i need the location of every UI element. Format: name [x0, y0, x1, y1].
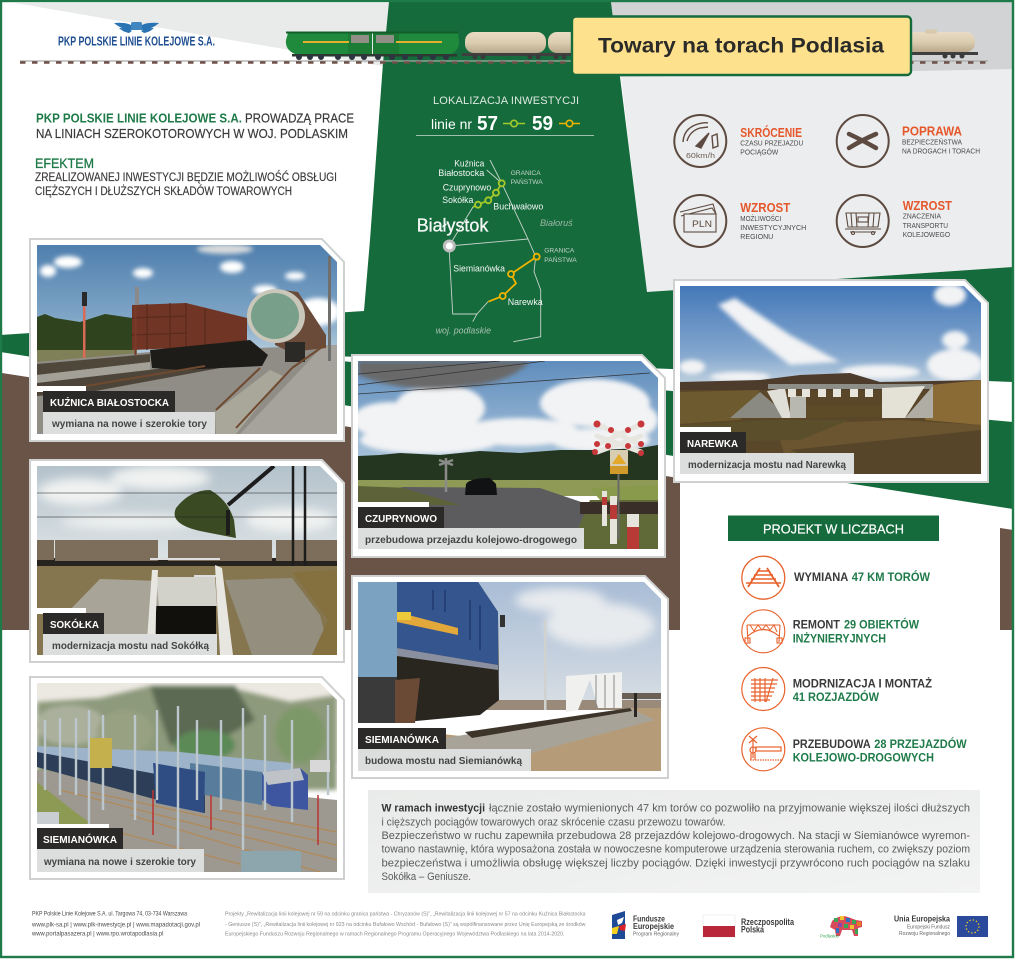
footer: contact: www.plk-sa.pl | www.plk-inwestycje.pl | www.mapadotacji.gov.pl	[31, 923, 200, 929]
panel: location header: 59	[532, 113, 553, 135]
item: level crossings: KOLEJOWO-DROGOWYCH	[793, 753, 934, 765]
intro text: NA LINIACH SZEROKOTOROWYCH W WOJ. PODLASKIM	[36, 126, 348, 141]
caption: budowa mostu nad Siemianówką	[365, 755, 522, 767]
benefit: skrócenie	[674, 115, 803, 167]
benefit: wzrost znaczenia: TRANSPORTU	[903, 221, 948, 230]
title: Towary na torach Podlasia	[598, 34, 884, 58]
item: turnouts: 41 ROZJAZDÓW	[793, 691, 879, 704]
photo: level crossing with car	[352, 361, 658, 549]
caption: wymiana na nowe i szerokie tory	[51, 418, 207, 430]
photo card: Czuprynowo	[352, 355, 665, 557]
intro text: CIĘŻSZYCH I DŁUŻSZYCH SKŁADÓW TOWAROWYCH	[35, 185, 292, 198]
caption	[37, 824, 204, 872]
intro text	[35, 110, 354, 198]
background: white wedge in green band	[253, 353, 1013, 422]
icon: speedometer: 60km/h	[686, 151, 715, 160]
logo: Unia Europejska	[894, 915, 988, 937]
text block: description: towano nastawnię, która wyposażona została w nowoczesne komputerowe urządzenia sterowania ruchem, co zwiększy poziom	[382, 844, 970, 856]
caption: KUŹNICA BIAŁOSTOCKA	[50, 396, 169, 409]
footer: project note	[225, 912, 586, 938]
item: track replacement	[742, 556, 930, 599]
map: Białystok marker	[444, 241, 454, 251]
benefit: poprawa: NA DROGACH I TORACH	[902, 147, 980, 156]
footer: contact: www.portalpasazera.pl | www.rpo.wrotapodlasia.pl	[31, 932, 163, 938]
map: line 59	[488, 254, 540, 302]
map: line 57	[473, 180, 505, 208]
item: engineering structures: 29 OBIEKTÓW	[844, 619, 919, 632]
map: labels: GRANICA	[544, 248, 575, 255]
footer: project note: Europejskiego Funduszu Rozwoju Regionalnego w ramach Regionalnego Programu Operacyjnego Województwa Podlaskiego na lata 2014-2020.	[225, 932, 565, 938]
caption: modernizacja mostu nad Narewką	[688, 459, 846, 471]
benefit: wzrost znaczenia: KOLEJOWEGO	[903, 230, 950, 239]
item: track replacement: 47 KM TORÓW	[852, 571, 930, 584]
caption	[358, 502, 584, 549]
icon: crossing barrier	[742, 728, 785, 771]
caption: NAREWKA	[687, 438, 738, 450]
intro text: ZREALIZOWANEJ INWESTYCJI BĘDZIE MOŻLIWOŚĆ OBSŁUGI	[35, 171, 337, 184]
benefit: skrócenie: CZASU PRZEJAZDU	[740, 139, 803, 148]
background: light grey triangle top left	[15, 3, 389, 66]
item: track replacement: WYMIANA	[794, 572, 848, 584]
photo card: Kuźnica Białostocka	[30, 239, 344, 441]
photo: bridge over culvert	[37, 466, 337, 655]
text block: description: Sokółka – Geniusze.	[382, 871, 471, 883]
caption	[37, 386, 215, 434]
footer: project note: - Geniusze (S)”, „Rewitalizacja linii kolejowej nr 923 na odcinku Bufałowo Wschód - Bufałowo (S)” są współfinansowane przez Unię Europejską ze środków	[225, 922, 586, 928]
caption: przebudowa przejazdu kolejowo-drogowego	[365, 534, 577, 546]
logo: Fundusze Europejskie	[612, 911, 679, 939]
title	[572, 16, 911, 75]
logo: Fundusze Europejskie: Program Regionalny	[633, 932, 679, 938]
photo: locomotive and bridge	[358, 582, 661, 771]
caption	[37, 608, 217, 655]
map: investment location	[417, 159, 577, 342]
text block: description: bezpieczeństwa i umożliwia obsługę większej liczby pociągów. Dzięki inwestycji przywrócono ruch pociągów na szlaku	[382, 858, 970, 870]
map: labels: Buchwałowo	[493, 201, 543, 211]
benefit: poprawa: BEZPIECZEŃSTWA	[902, 138, 962, 147]
heading	[728, 516, 939, 541]
photo: station yard with blue wagons	[35, 683, 337, 872]
map: labels: Czuprynowo	[443, 183, 491, 193]
photo card: Sokółka	[30, 460, 344, 662]
logo: Unia Europejska: Rozwoju Regionalnego	[899, 931, 950, 937]
icon: crossing X	[837, 115, 889, 167]
caption: SIEMIANÓWKA	[43, 833, 117, 846]
icon: winged emblem	[114, 22, 159, 33]
caption: wymiana na nowe i szerokie tory	[43, 856, 196, 868]
panel: location header: LOKALIZACJA INWESTYCJI	[433, 95, 579, 107]
panel: location header: 57	[477, 113, 498, 135]
railway track	[20, 61, 988, 62]
benefit: skrócenie: SKRÓCENIE	[740, 125, 802, 140]
item: level crossings	[742, 728, 967, 771]
map: labels: Białoruś	[540, 218, 573, 228]
footer: contact: PKP Polskie Linie Kolejowe S.A. ul. Targowa 74, 03-734 Warszawa	[32, 912, 188, 918]
map: labels: Białostocka	[438, 168, 484, 178]
item: engineering structures: REMONT	[793, 620, 840, 632]
benefit: skrócenie: POCIĄGÓW	[740, 148, 779, 157]
caption: SIEMIANÓWKA	[365, 733, 439, 746]
map: labels: GRANICA	[511, 170, 541, 177]
map: labels: Kuźnica	[454, 159, 484, 169]
photo card: Siemianówka tracks	[30, 677, 344, 879]
footer: project note: Projekty „Rewitalizacja linii kolejowej nr 59 na odcinku granica państwa - Chryzanów (S)”, „Rewitalizacja linii kolejowej nr 57 na odcinku Kuźnica Białostocka	[225, 912, 586, 918]
item: engineering structures: INŻYNIERYJNYCH	[793, 632, 886, 645]
map: border and road lines	[449, 160, 541, 342]
text block: description: łącznie zostało wymienionych 47 km torów co pozwoliło na przyjmowanie większej ilości dłuższych	[489, 803, 970, 815]
benefit: poprawa	[837, 115, 980, 167]
panel: location header	[416, 95, 594, 136]
item: level crossings: 28 PRZEJAZDÓW	[874, 738, 967, 751]
item: turnouts: MODRNIZACJA I MONTAŻ	[793, 677, 932, 690]
caption: SOKÓŁKA	[50, 618, 99, 631]
item: engineering structures	[742, 610, 919, 653]
caption	[358, 723, 531, 771]
map: labels: PAŃSTWA	[511, 177, 543, 186]
logo: Fundusze Europejskie: Europejskie	[633, 922, 674, 931]
photo card: Siemianówka bridge	[352, 576, 668, 778]
benefit: wzrost inwestycji	[674, 195, 806, 247]
logo: Podlaskie bison: Podlaskie	[820, 934, 839, 940]
logo: Podlaskie bison	[820, 916, 862, 940]
text block: description: W ramach inwestycji	[382, 803, 485, 815]
logo: Fundusze Europejskie: Fundusze	[633, 915, 665, 924]
item: turnouts	[742, 668, 932, 710]
benefit: wzrost inwestycji: WZROST	[740, 201, 791, 215]
text block: description	[368, 790, 980, 893]
benefit: wzrost znaczenia: WZROST	[903, 199, 952, 213]
intro text: PROWADZĄ PRACE	[245, 110, 354, 126]
icon: freight wagon	[837, 195, 889, 247]
heading: PROJEKT W LICZBACH	[763, 521, 904, 536]
map: labels: woj. podlaskie	[436, 325, 491, 335]
train: locomotives and tank wagons	[286, 30, 978, 60]
text block: description: i cięższych pociągów towarowych oraz skrócenie czasu przewozu towarów.	[382, 816, 726, 828]
item: level crossings: PRZEBUDOWA	[793, 739, 871, 751]
photo: freight train on tracks	[37, 244, 340, 434]
panel: benefits	[674, 115, 980, 247]
background: darker grey band top right	[611, 2, 1013, 77]
intro text: EFEKTEM	[35, 155, 94, 171]
photo: railway bridge in fields	[679, 284, 983, 474]
logo: PKP PLK	[58, 22, 215, 48]
logo: Rzeczpospolita Polska: Polska	[741, 924, 765, 934]
icon: banknote PLN: PLN	[692, 219, 712, 230]
background: brown band	[2, 373, 1013, 630]
panel: project in numbers	[728, 516, 967, 771]
logo: Unia Europejska: Unia Europejska	[894, 915, 950, 924]
map: labels: Sokółka	[442, 195, 473, 205]
background: light grey panel right	[620, 62, 1013, 292]
map: labels: Narewka	[508, 297, 543, 307]
icon: track	[742, 556, 785, 599]
panel: location header: linie nr	[431, 117, 473, 132]
map: labels: PAŃSTWA	[544, 255, 577, 264]
logo wordmark: PKP POLSKIE LINIE KOLEJOWE S.A.	[58, 34, 215, 48]
caption	[680, 427, 854, 474]
photo card: Narewka	[674, 280, 988, 482]
benefit: wzrost znaczenia: ZNACZENIA	[903, 212, 941, 221]
map: labels	[417, 159, 577, 335]
intro text: PKP POLSKIE LINIE KOLEJOWE S.A.	[36, 110, 242, 126]
logo: Unia Europejska: Europejski Fundusz	[907, 924, 950, 930]
benefit: wzrost inwestycji: MOŻLIWOŚCI	[740, 214, 781, 223]
logo: Rzeczpospolita Polska: Rzeczpospolita	[741, 917, 795, 927]
benefit: wzrost inwestycji: INWESTYCYJNYCH	[740, 223, 806, 232]
map: labels: Białystok	[417, 216, 489, 236]
tank wagons	[462, 30, 978, 60]
footer: contact	[31, 912, 200, 938]
logo: Rzeczpospolita Polska	[703, 915, 795, 937]
map: labels: Siemianówka	[453, 264, 505, 274]
locomotive	[286, 32, 459, 60]
caption: modernizacja mostu nad Sokółką	[52, 640, 209, 652]
icon: bridge	[742, 610, 785, 653]
background: green central shape and diagonal band	[2, 2, 1013, 509]
benefit: wzrost inwestycji: REGIONU	[740, 232, 773, 241]
background: white panel under project numbers	[680, 460, 1000, 635]
icon: switch	[742, 668, 785, 710]
text block: description: Bezpieczeństwo w ruchu zapewniła przebudowa 28 przejazdów kolejowo-drogowych. Na stacji w Siemianówce wyremon-	[382, 830, 970, 842]
caption: CZUPRYNOWO	[365, 513, 437, 525]
benefit: poprawa: POPRAWA	[902, 124, 962, 138]
benefit: wzrost znaczenia	[837, 195, 952, 247]
